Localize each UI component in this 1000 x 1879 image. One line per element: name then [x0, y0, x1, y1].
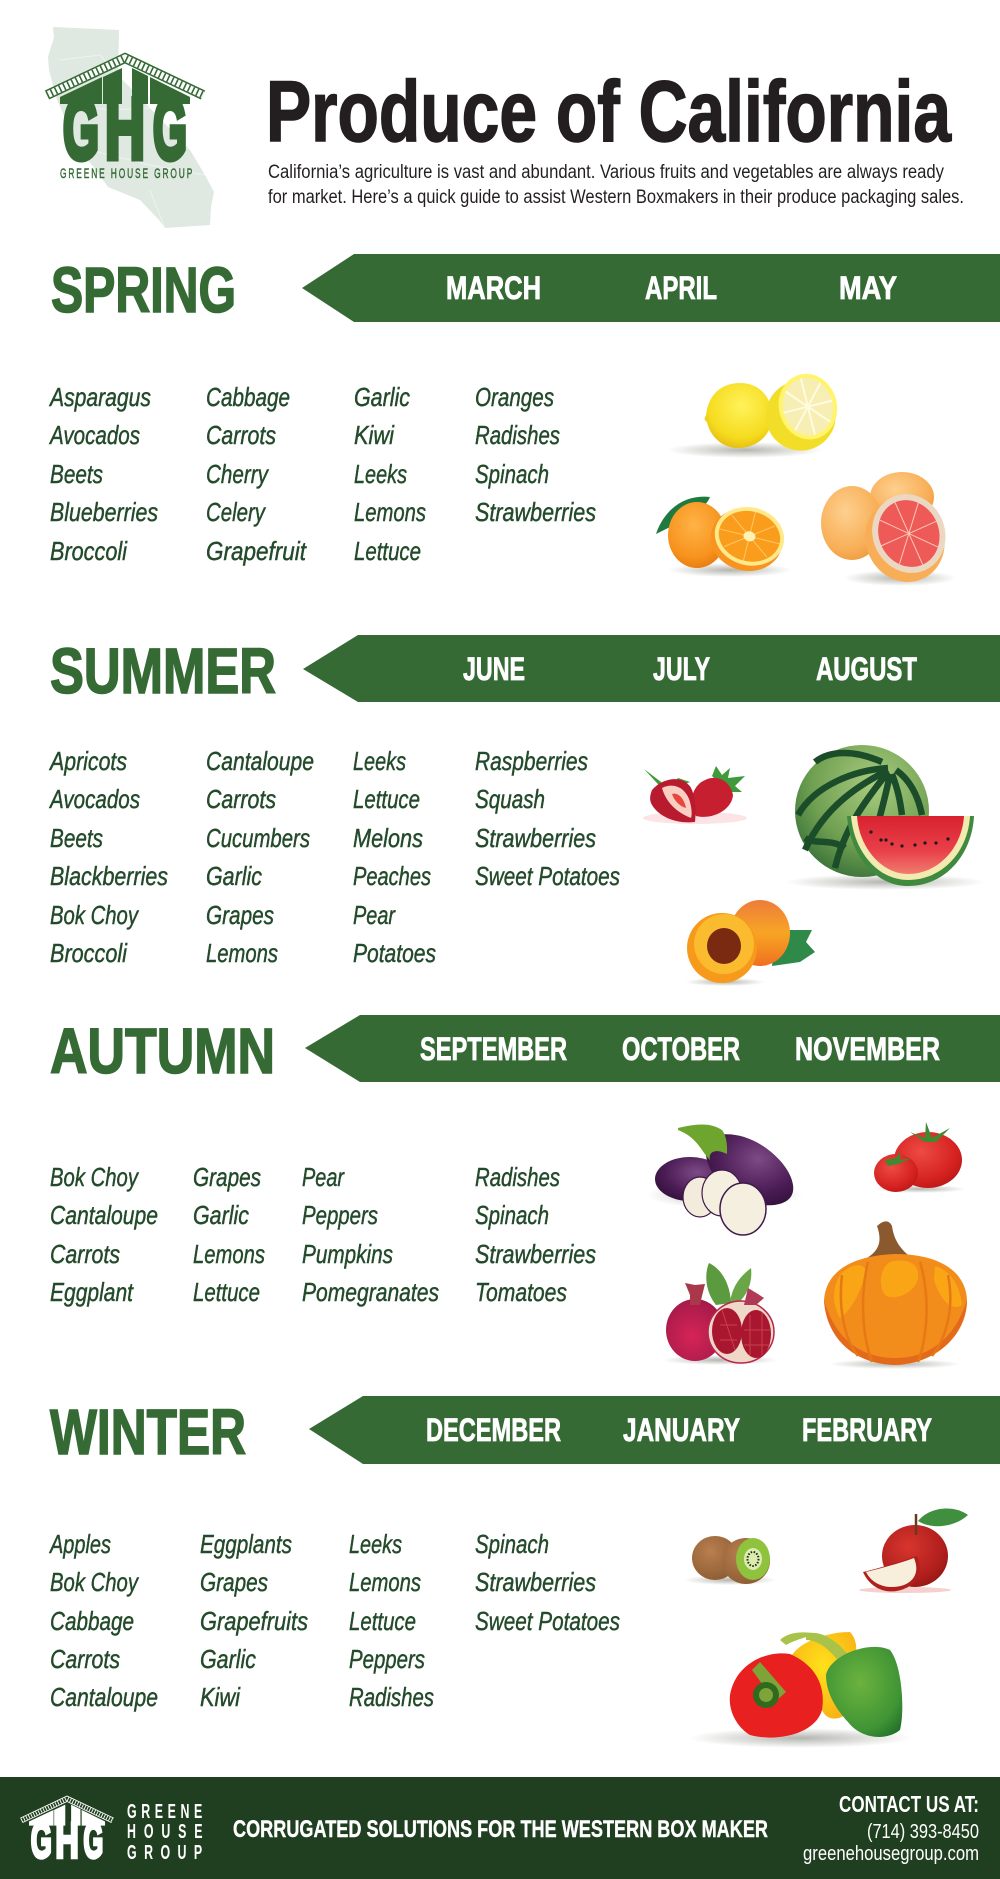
produce list: spring: Oranges: [475, 382, 554, 412]
month banner: summer: AUGUST: [816, 651, 917, 687]
produce list: spring: Strawberries: [475, 497, 596, 527]
produce list: summer: Grapes: [206, 900, 274, 930]
illustration: orange: [656, 497, 792, 579]
illustration: pomegranate: [662, 1263, 778, 1365]
produce list: summer: Apricots: [48, 746, 127, 776]
produce list: summer: Strawberries: [475, 823, 596, 853]
produce list: spring: Broccoli: [50, 536, 128, 566]
footer band: [0, 1777, 1000, 1879]
produce list: spring: Leeks: [354, 459, 407, 489]
produce list: winter: [48, 1529, 620, 1712]
footer company name: HOUSE: [127, 1820, 210, 1843]
month banner: summer: JUNE: [463, 651, 525, 687]
illustration: peach: [685, 900, 815, 986]
produce list: autumn: Pumpkins: [302, 1239, 393, 1269]
heading: winter: WINTER: [50, 1396, 246, 1468]
house mark: G: [153, 82, 187, 178]
month banner: autumn: SEPTEMBER: [420, 1031, 567, 1067]
produce list: spring: Lettuce: [354, 536, 421, 566]
month banner: winter: DECEMBER: [426, 1412, 561, 1448]
produce list: summer: Raspberries: [475, 746, 588, 776]
illustration: lemons: [667, 368, 846, 458]
produce list: winter: Carrots: [50, 1644, 120, 1674]
produce list: winter: Cabbage: [50, 1606, 134, 1636]
produce list: spring: [48, 382, 596, 566]
produce list: spring: Cabbage: [206, 382, 290, 412]
produce list: summer: Beets: [50, 823, 103, 853]
illustration: strawberries: [643, 766, 747, 824]
produce list: autumn: [50, 1162, 596, 1307]
produce list: summer: Cantaloupe: [206, 746, 314, 776]
produce list: summer: Blackberries: [50, 861, 168, 891]
produce list: autumn: Strawberries: [475, 1239, 596, 1269]
produce list: winter: Grapes: [200, 1567, 268, 1597]
produce list: summer: Sweet Potatoes: [475, 861, 620, 891]
produce list: spring: Lemons: [354, 497, 426, 527]
contact details: [803, 1791, 979, 1865]
produce list: autumn: Lemons: [193, 1239, 265, 1269]
produce list: summer: Leeks: [353, 746, 406, 776]
produce list: autumn: Garlic: [193, 1200, 249, 1230]
produce list: autumn: Pomegranates: [302, 1277, 439, 1307]
produce list: winter: Grapefruits: [200, 1606, 308, 1636]
produce list: autumn: Peppers: [302, 1200, 378, 1230]
footer logo: [21, 1799, 113, 1869]
illustration: apple: [859, 1508, 968, 1593]
month banner: summer: [303, 635, 1000, 702]
footer company name: GREENE: [127, 1800, 207, 1823]
month banner: spring: [302, 254, 1000, 322]
produce list: summer: Potatoes: [353, 938, 436, 968]
logo: Greene House Group over California map: [47, 27, 214, 228]
produce list: winter: Eggplants: [200, 1529, 292, 1559]
roof truss: [47, 58, 203, 95]
produce list: summer: Avocados: [48, 784, 140, 814]
produce list: winter: Radishes: [349, 1682, 434, 1712]
produce list: spring: Beets: [50, 459, 103, 489]
month banner: summer: JULY: [653, 651, 710, 687]
produce list: winter: Spinach: [475, 1529, 549, 1559]
produce list: summer: Lemons: [206, 938, 278, 968]
house mark: H: [105, 82, 145, 178]
footer logo: G: [31, 1812, 52, 1869]
produce list: winter: Bok Choy: [50, 1567, 140, 1597]
house mark: G: [63, 82, 99, 178]
footer logo: G: [83, 1812, 103, 1869]
produce list: autumn: Grapes: [193, 1162, 261, 1192]
produce list: summer: Broccoli: [50, 938, 128, 968]
produce list: spring: Celery: [206, 497, 267, 527]
illustration: bell peppers: [688, 1632, 912, 1748]
produce list: summer: Cucumbers: [206, 823, 310, 853]
produce list: autumn: Lettuce: [193, 1277, 260, 1307]
logo caption: GREENE HOUSE GROUP: [60, 167, 194, 182]
heading: autumn: AUTUMN: [50, 1015, 275, 1087]
produce list: winter: Kiwi: [200, 1682, 241, 1712]
produce list: summer: [48, 746, 620, 968]
produce list: autumn: Radishes: [475, 1162, 560, 1192]
month banner: winter: FEBRUARY: [802, 1412, 932, 1448]
month banner: winter: [309, 1396, 1000, 1464]
intro text: [268, 162, 964, 208]
month banner: autumn: OCTOBER: [622, 1031, 740, 1067]
produce list: summer: Garlic: [206, 861, 262, 891]
produce list: winter: Leeks: [349, 1529, 402, 1559]
produce list: winter: Apples: [48, 1529, 111, 1559]
produce list: summer: Lettuce: [353, 784, 420, 814]
produce list: spring: Blueberries: [50, 497, 158, 527]
produce list: spring: Cherry: [206, 459, 270, 489]
produce list: autumn: Cantaloupe: [50, 1200, 158, 1230]
illustration: watermelon: [785, 745, 985, 890]
month banner: autumn: [305, 1015, 1000, 1082]
produce list: autumn: Spinach: [475, 1200, 549, 1230]
produce list: winter: Garlic: [200, 1644, 256, 1674]
produce list: autumn: Bok Choy: [50, 1162, 140, 1192]
produce list: spring: Garlic: [354, 382, 410, 412]
illustration: kiwi: [684, 1536, 776, 1585]
month banner: spring: MARCH: [446, 270, 541, 306]
produce list: winter: Lettuce: [349, 1606, 416, 1636]
produce list: winter: Lemons: [349, 1567, 421, 1597]
produce list: summer: Melons: [353, 823, 423, 853]
produce list: spring: Radishes: [475, 420, 560, 450]
heading: spring: SPRING: [51, 254, 236, 326]
produce list: summer: Bok Choy: [50, 900, 140, 930]
produce list: summer: Pear: [353, 900, 396, 930]
month banner: winter: JANUARY: [623, 1412, 740, 1448]
month banner: spring: MAY: [839, 270, 897, 306]
month banner: spring: APRIL: [645, 270, 717, 306]
produce list: autumn: Carrots: [50, 1239, 120, 1269]
produce list: winter: Sweet Potatoes: [475, 1606, 620, 1636]
produce list: summer: Peaches: [353, 861, 431, 891]
illustration: tomatoes: [874, 1122, 966, 1193]
footer company name: GROUP: [127, 1841, 210, 1864]
illustration: grapefruit: [821, 472, 961, 595]
produce list: autumn: Eggplant: [50, 1277, 134, 1307]
contact details: (714) 393-8450: [867, 1821, 979, 1843]
produce list: spring: Spinach: [475, 459, 549, 489]
produce list: summer: Squash: [475, 784, 545, 814]
map of California: [48, 27, 214, 228]
illustration: pumpkin: [824, 1221, 967, 1369]
footer tagline: CORRUGATED SOLUTIONS FOR THE WESTERN BOX MAKER: [233, 1816, 768, 1843]
footer company name: [127, 1800, 210, 1864]
produce list: spring: Avocados: [48, 420, 140, 450]
produce list: spring: Kiwi: [354, 420, 395, 450]
produce list: spring: Grapefruit: [206, 536, 308, 566]
produce list: autumn: Pear: [302, 1162, 345, 1192]
produce list: winter: Peppers: [349, 1644, 425, 1674]
produce list: winter: Strawberries: [475, 1567, 596, 1597]
house mark: [60, 68, 190, 178]
produce list: autumn: Tomatoes: [475, 1277, 567, 1307]
produce list: winter: Cantaloupe: [50, 1682, 158, 1712]
footer logo: H: [55, 1812, 79, 1869]
produce list: spring: Carrots: [206, 420, 276, 450]
illustration: eggplant: [647, 1124, 803, 1235]
heading: summer: SUMMER: [50, 635, 276, 707]
month banner: autumn: NOVEMBER: [795, 1031, 940, 1067]
produce list: summer: Carrots: [206, 784, 276, 814]
produce list: spring: Asparagus: [48, 382, 151, 412]
